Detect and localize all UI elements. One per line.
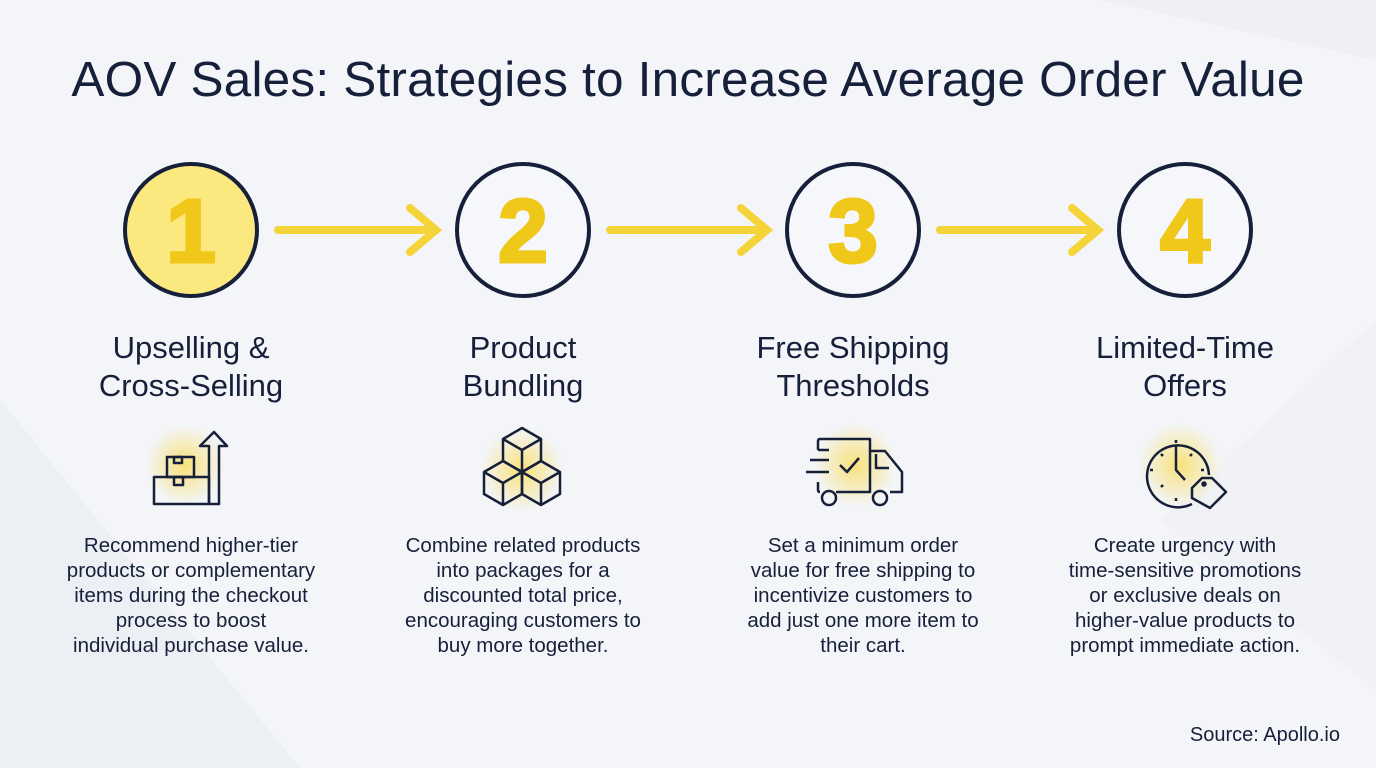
description 2: into packages for a: [436, 559, 610, 582]
circle 2: 2: [498, 182, 548, 282]
description 4: or exclusive deals on: [1089, 584, 1281, 607]
description 3: add just one more item to: [747, 609, 979, 632]
heading 2: Bundling: [463, 368, 583, 403]
description 2: encouraging customers to: [405, 609, 641, 632]
heading 3: Thresholds: [776, 368, 930, 403]
description 4: higher-value products to: [1075, 609, 1295, 632]
description 2: buy more together.: [438, 634, 608, 657]
arrow 2: [610, 208, 767, 252]
icon: cubes: [480, 428, 564, 512]
circle 4: 4: [1160, 182, 1210, 282]
circle 4: [1119, 164, 1251, 296]
description 2: discounted total price,: [423, 584, 623, 607]
arrow 3: [940, 208, 1098, 252]
icon: delivery truck: [806, 423, 902, 507]
heading 4: Offers: [1143, 368, 1227, 403]
icons: [148, 426, 1228, 510]
heading 3: Free Shipping: [756, 330, 950, 365]
description 1: [67, 534, 315, 657]
description 1: Recommend higher-tier: [84, 534, 298, 557]
heading 2: Product: [470, 330, 576, 365]
arrow 1: [278, 208, 436, 252]
circle 1: 1: [166, 182, 216, 282]
circle 3: 3: [828, 182, 878, 282]
heading 3: [756, 330, 950, 403]
step flow: circles and arrows: [123, 162, 1253, 298]
description 1: individual purchase value.: [73, 634, 309, 657]
description 3: Set a minimum order: [768, 534, 958, 557]
description 2: Combine related products: [406, 534, 640, 557]
heading 2: [463, 330, 583, 403]
source: Source: Apollo.io: [1190, 724, 1340, 746]
description 1: products or complementary: [67, 559, 315, 582]
heading 4: [1096, 330, 1274, 403]
description 4: Create urgency with: [1094, 534, 1276, 557]
icon: clock with tag: [1138, 423, 1226, 508]
description 1: process to boost: [116, 609, 266, 632]
description 3: incentivize customers to: [754, 584, 972, 607]
circle 2: [457, 164, 589, 296]
description 3: their cart.: [820, 634, 906, 657]
description 2: [405, 534, 641, 657]
description 3: [747, 534, 979, 657]
heading 1: [99, 330, 283, 403]
description 4: time-sensitive promotions: [1069, 559, 1301, 582]
title: AOV Sales: Strategies to Increase Average Order Value: [71, 52, 1305, 107]
heading 1: Cross-Selling: [99, 368, 283, 403]
circle 1: [125, 164, 257, 296]
description 4: prompt immediate action.: [1070, 634, 1300, 657]
icon: boxes with up arrow: [145, 425, 227, 505]
description 3: value for free shipping to: [751, 559, 975, 582]
description 1: items during the checkout: [74, 584, 308, 607]
description 4: [1069, 534, 1301, 657]
heading 4: Limited-Time: [1096, 330, 1274, 365]
heading 1: Upselling &: [113, 330, 269, 365]
circle 3: [787, 164, 919, 296]
